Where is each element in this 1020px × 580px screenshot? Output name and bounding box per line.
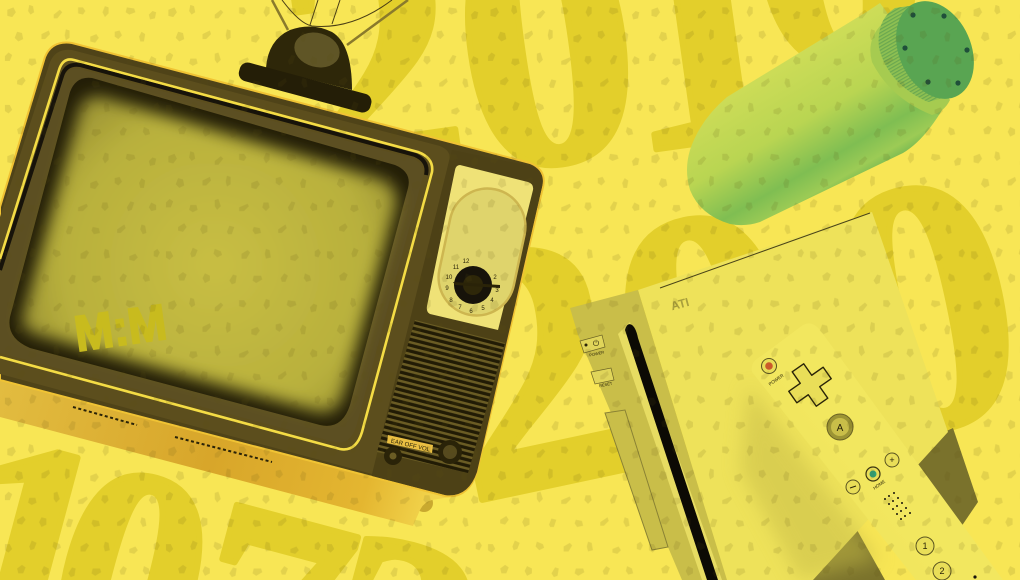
plus button: [885, 453, 899, 467]
dial numbers: 12: [463, 259, 470, 265]
console side panel: [638, 212, 948, 580]
speaker grille: [377, 320, 505, 473]
bottle cap top: [881, 0, 989, 111]
dial numbers: 2: [493, 275, 497, 281]
power button: ⏻: [593, 339, 600, 348]
background numeral 2000: 0: [579, 122, 838, 549]
button 1: 1: [922, 541, 928, 551]
button 2: [933, 562, 951, 580]
dial numbers: 11: [453, 265, 460, 271]
television: [0, 0, 544, 526]
background numeral 2000: [401, 92, 1020, 579]
button 2: 2: [939, 566, 945, 576]
screen: [22, 96, 397, 412]
home button: HOME: [872, 479, 886, 491]
chrome line: [0, 59, 432, 449]
background numeral 2000: 2: [401, 152, 660, 579]
cabinet: [0, 43, 544, 496]
memory door: [605, 410, 668, 550]
volume knob: [438, 440, 462, 464]
console front face: [570, 290, 727, 580]
dial numbers: 9: [445, 286, 449, 292]
dial numbers: 4: [490, 298, 494, 304]
minus button: [846, 480, 860, 494]
black rim: [0, 65, 427, 270]
dial numbers: 6: [469, 309, 473, 315]
game remote: [752, 323, 1003, 580]
remote power button: [762, 358, 785, 387]
outer bezel: [0, 50, 450, 474]
inner bezel: [0, 69, 424, 443]
home button: [866, 467, 886, 491]
a button: [827, 414, 853, 440]
console stand: [808, 428, 978, 580]
switch plate: [387, 435, 433, 454]
earphone jack: [384, 447, 402, 465]
button 1: [916, 537, 934, 555]
switch plate: EAR OFF VOL: [390, 439, 431, 454]
dial numbers: 8: [449, 298, 453, 304]
screen watermark: M:M: [71, 294, 170, 362]
dial numbers: 5: [481, 306, 485, 312]
control column: [372, 150, 543, 495]
gold base: [0, 378, 450, 526]
dial numbers: [445, 259, 499, 315]
background numeral 1973: [0, 365, 513, 580]
d-pad: [781, 356, 839, 414]
console logo: ATI: [669, 295, 691, 313]
screen opening: [9, 78, 409, 426]
reset button: [591, 368, 614, 388]
remote shadow: [740, 385, 880, 580]
bottle: [687, 0, 989, 225]
background numeral 2010: [253, 0, 952, 269]
remote body: [752, 323, 1003, 580]
antenna rods: [272, 0, 408, 45]
dial numbers: 3: [495, 288, 499, 294]
control plate: [427, 165, 533, 330]
bottle neck ring: [870, 15, 950, 115]
antenna base: [237, 26, 373, 114]
dial recess: [432, 181, 532, 323]
console top rim: [660, 213, 870, 288]
dial knob: [453, 266, 500, 304]
speaker holes: [884, 492, 911, 520]
bottle cap side: [879, 3, 965, 102]
dial numbers: 10: [446, 275, 453, 281]
plus button: +: [889, 455, 895, 465]
power button: [580, 335, 605, 358]
a button: A: [837, 423, 844, 434]
dial numbers: 7: [458, 305, 462, 311]
reset button: RESET: [599, 381, 613, 388]
game console: [570, 212, 978, 580]
remote power button: POWER: [768, 372, 785, 387]
disc slot: [625, 324, 718, 580]
power button: POWER: [589, 349, 605, 358]
disc slot surround: [618, 322, 722, 580]
bottle body: [687, 3, 945, 225]
